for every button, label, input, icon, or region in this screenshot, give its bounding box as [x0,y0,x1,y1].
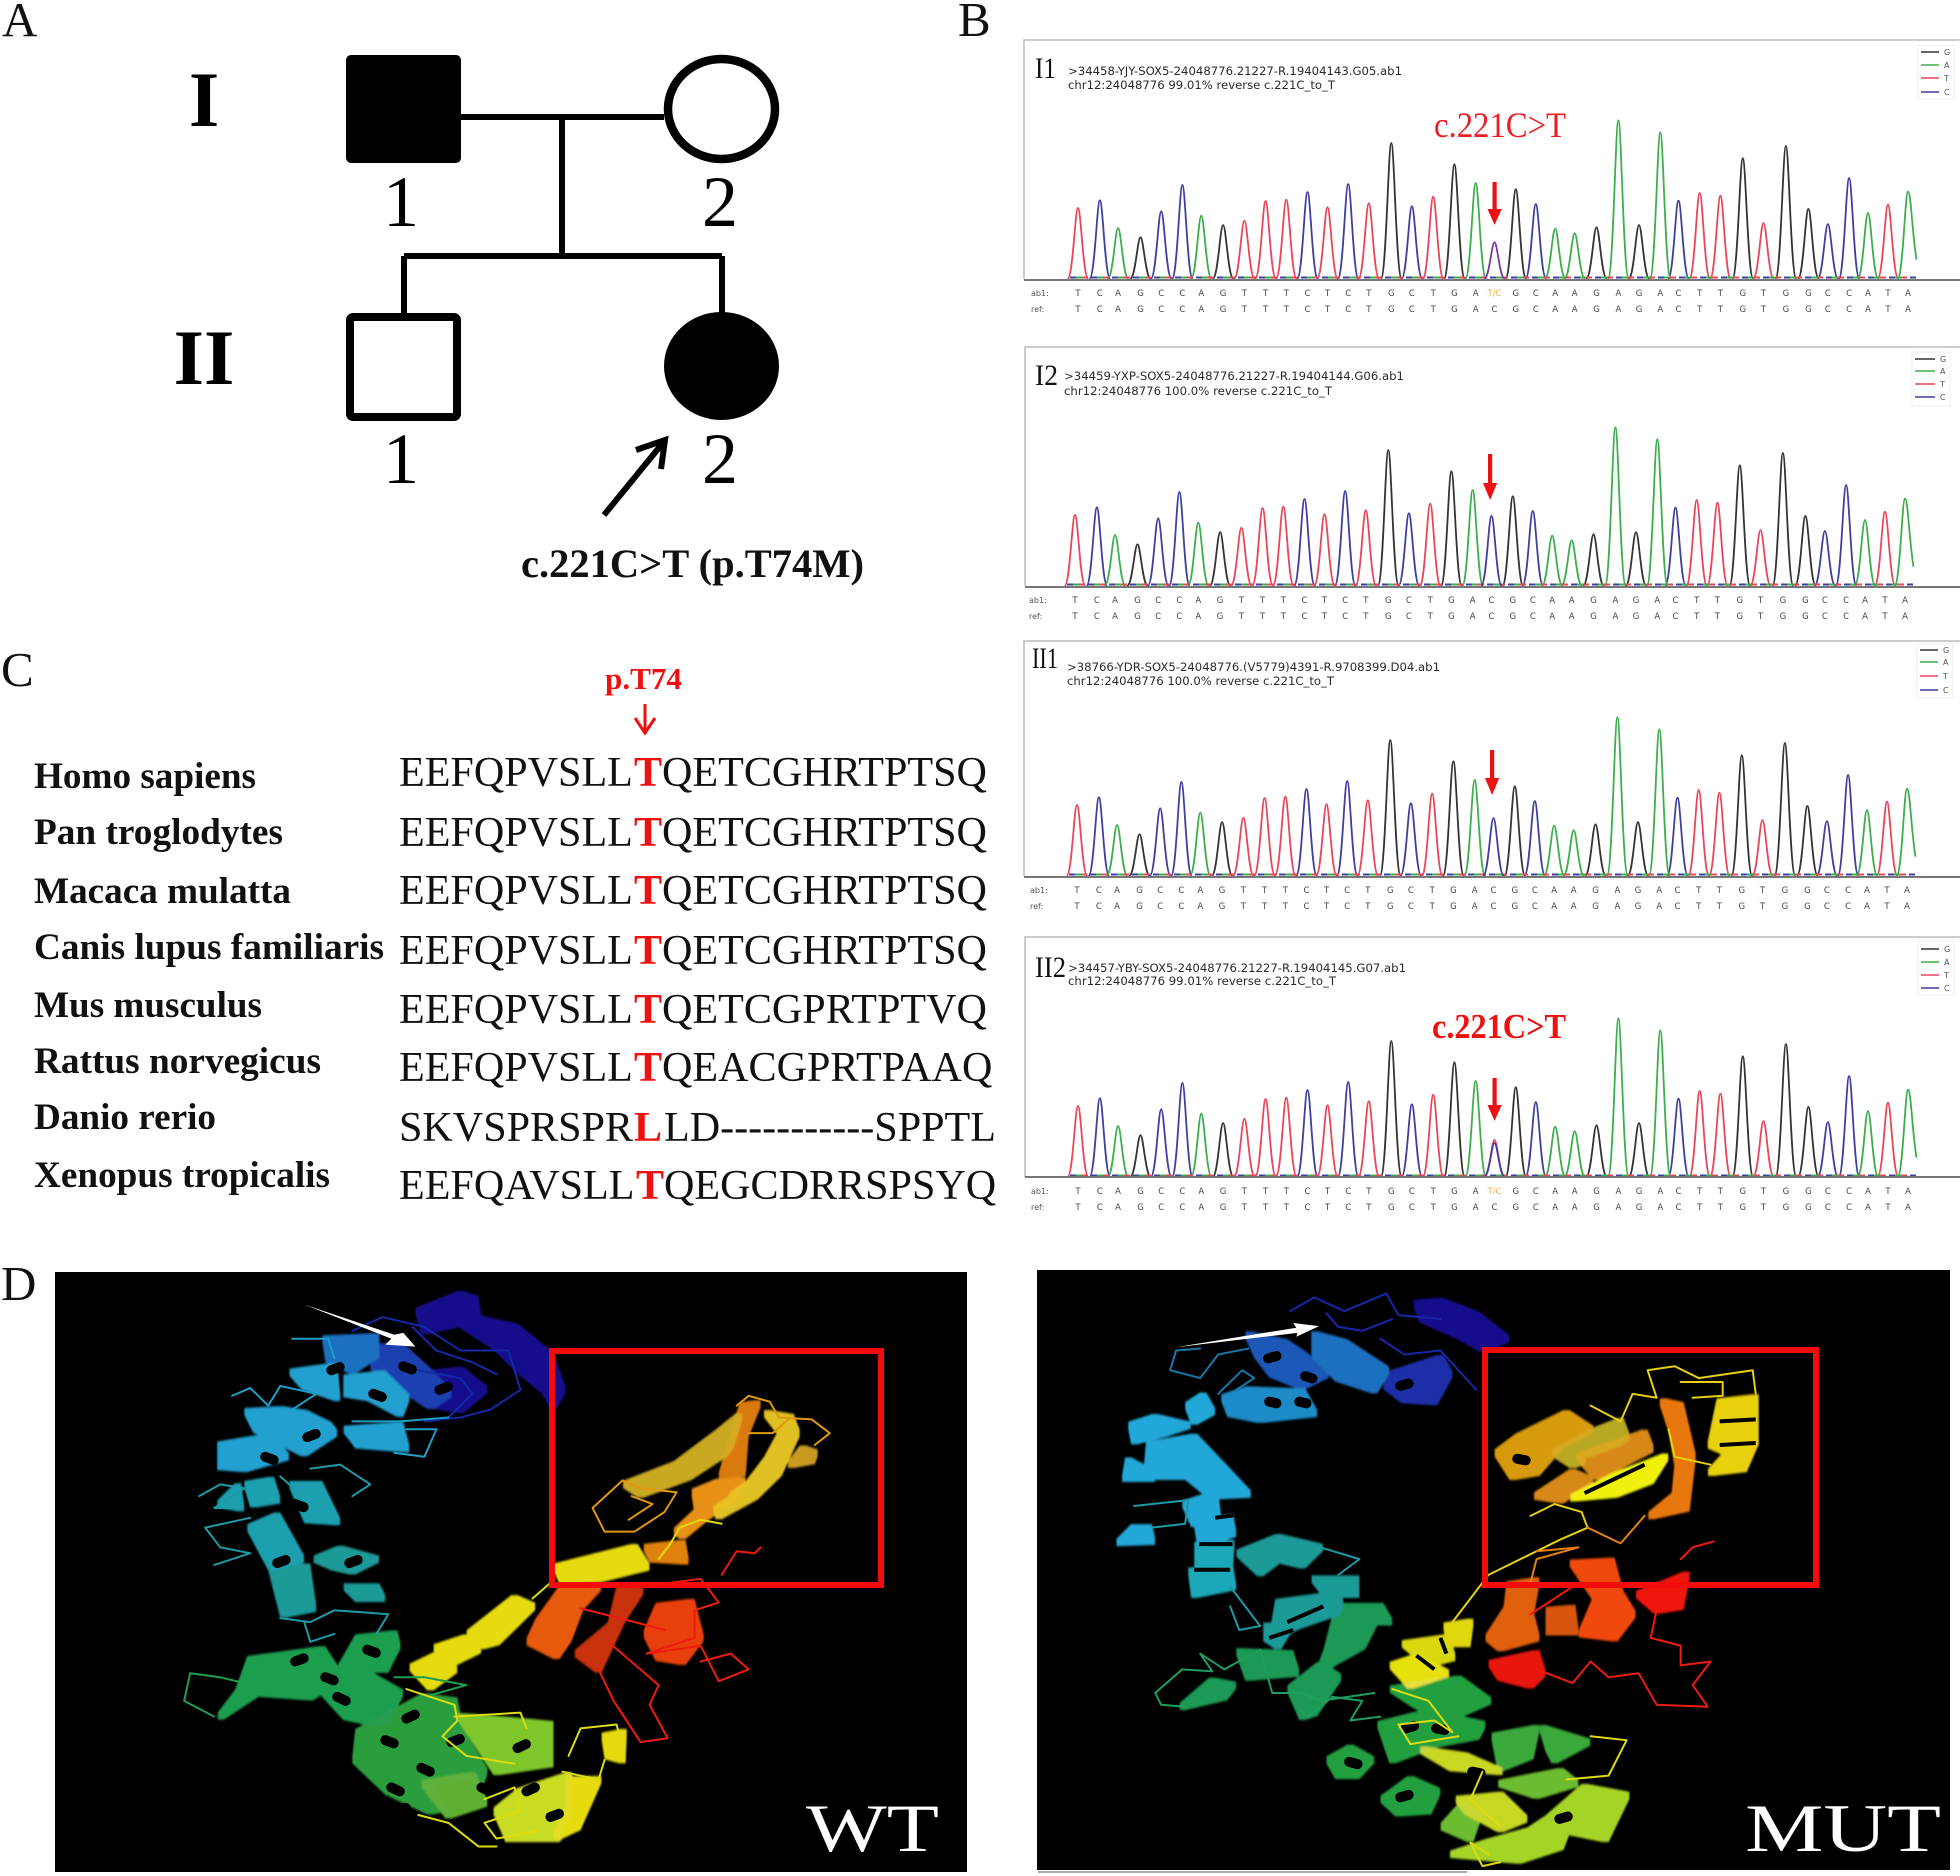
variant callout: c.221C>T [1432,1007,1566,1046]
frame [1025,937,1960,1177]
base calls: GCAAGAGACTTGTGGCCATA [1513,289,1911,299]
individual number I-2: 2 [702,162,738,242]
trace legend: C [1940,393,1946,402]
panel letter C: C [1,642,34,697]
trace legend: G [1944,945,1950,954]
baseline [1025,1176,1960,1178]
pedigree connecting lines [404,117,722,315]
panel A: pedigree [2,0,864,586]
panel D: wild-type protein model [55,1272,967,1872]
panel C: sequence conservation alignment [1,642,996,1209]
panel B chromatogram I1 [1024,40,1960,315]
MUT label: MUT [1745,1790,1941,1866]
base calls [1031,1187,1911,1213]
black background [55,1272,967,1872]
base calls: TCAGCCAGTTTCTCTGCTGACGCAAGAGACTTGTGGCCATA [1071,612,1908,622]
highlight box [552,1351,881,1585]
variant arrow [1488,1078,1502,1121]
variant arrow [1485,750,1499,795]
base calls: ab1: [1031,289,1049,298]
sample label: II1 [1032,642,1058,675]
aligned sequences: QEGCDRRSPSYQ [664,1162,996,1209]
trace legend [1918,45,1954,99]
trace legend: T [1943,74,1949,83]
aligned sequences: SKVSPRSPR [399,1104,634,1151]
proband arrow [604,440,665,515]
trace legend: T [1943,971,1949,980]
panel letter D: D [1,1256,36,1311]
aligned sequences: QETCGHRTPTSQ [662,749,987,796]
aligned sequences: QETCGHRTPTSQ [662,927,987,974]
individual number I-1: 1 [383,162,419,242]
ribbon structure [1119,1293,1756,1866]
base calls: GCAAGAGACTTGTGGCCATA [1513,1187,1911,1197]
aligned sequences: T [634,927,662,974]
traces [1068,1018,1916,1177]
trace legend: T [1942,672,1948,681]
trace legend: G [1940,355,1946,364]
baseline [1024,279,1960,281]
base calls: T/C [1486,1187,1502,1197]
panel D: mutant protein model [1037,1270,1950,1872]
highlight box [1485,1350,1816,1585]
generation label II: II [174,314,234,401]
base calls: TCAGCCAGTTTCTCTGCTGA [1074,1187,1479,1197]
file header: chr12:24048776 100.0% reverse c.221C_to_T [1067,674,1334,688]
white arrow [304,1304,415,1347]
base calls: TCAGCCAGTTTCTCTGCTGACGCAAGAGACTTGTGGCCATA [1071,596,1908,606]
base calls: ab1: [1029,596,1047,605]
aligned sequences: T [636,1162,664,1209]
base calls: ab1: [1031,1187,1049,1196]
variant label: c.221C>T (p.T74M) [521,541,864,586]
file header [1067,660,1440,688]
base calls: TCAGCCAGTTTCTCTGCTGACGCAAGAGACTTGTGGCCATA [1073,902,1910,912]
ribbon structure [184,1295,830,1846]
base calls: TCAGCCAGTTTCTCTGCTGACGCAAGAGACTTGTGGCCATA [1074,1203,1911,1213]
aligned sequences: EEFQPVSLL [399,927,633,974]
trace legend: A [1943,658,1949,667]
aligned sequences: EEFQPVSLL [399,986,633,1033]
aligned sequences: T [634,809,662,856]
species names: Xenopus tropicalis [34,1155,330,1196]
base calls [1029,596,1908,622]
aligned sequences: QEACGPRTPAAQ [662,1044,992,1091]
trace legend: A [1940,367,1946,376]
base calls: T/C [1486,289,1502,299]
white arrow [1175,1323,1319,1347]
black background [1037,1270,1950,1870]
aligned sequences: QETCGHRTPTSQ [662,809,987,856]
base calls: ref: [1031,1203,1044,1212]
aligned sequences: EEFQPVSLL [399,1044,633,1091]
panel B chromatogram II2 [1025,937,1960,1213]
traces [1066,717,1916,876]
trace legend: G [1944,48,1950,57]
file header: >34458-YJY-SOX5-24048776.21227-R.19404143.G05.ab1 [1068,64,1402,78]
frame [1024,40,1960,279]
trace legend: C [1943,686,1949,695]
aligned sequences: T [634,749,662,796]
aligned sequences: T [634,986,662,1033]
base calls: TCAGCCAGTTTCTCTGCTGACGCAAGAGACTTGTGGCCATA [1073,886,1910,896]
file header: chr12:24048776 99.01% reverse c.221C_to_T [1068,78,1335,92]
affected proband II-2 [664,312,779,420]
sample label: I1 [1035,52,1056,85]
trace legend [1918,941,1954,995]
trace legend: A [1944,61,1950,70]
base calls: ref: [1030,902,1043,911]
trace legend [1912,352,1950,406]
species names: Rattus norvegicus [34,1041,321,1082]
aligned sequences [399,749,996,1209]
unaffected brother II-1 [350,317,457,417]
base calls: ref: [1031,305,1044,314]
variant arrow [1488,182,1502,225]
file header: chr12:24048776 99.01% reverse c.221C_to_T [1068,974,1336,988]
WT label: WT [806,1790,939,1866]
file header [1068,64,1402,92]
traces [1068,120,1916,279]
base calls: ab1: [1030,886,1048,895]
unaffected mother I-2 [668,59,775,159]
aligned sequences: QETCGHRTPTSQ [662,867,987,914]
traces [1064,427,1914,586]
species names: Pan troglodytes [34,812,283,853]
sample label: II2 [1035,951,1066,984]
base calls: TCAGCCAGTTTCTCTGCTGACGCAAGAGACTTGTGGCCATA [1074,305,1911,315]
variant arrow [1483,454,1497,500]
species names: Danio rerio [34,1097,216,1138]
aligned sequences: EEFQPVSLL [399,867,633,914]
affected father I-1 [346,55,461,163]
trace legend: G [1943,646,1949,655]
frame [1024,641,1960,876]
aligned sequences: EEFQPVSLL [399,749,633,796]
base calls: TCAGCCAGTTTCTCTGCTGA [1074,289,1479,299]
trace legend: A [1944,958,1950,967]
species names: Macaca mulatta [34,871,291,912]
aligned sequences: L [634,1104,662,1151]
base calls [1031,289,1911,315]
aligned sequences: LD-----------SPPTL [664,1104,996,1151]
base calls: ref: [1029,612,1042,621]
panel B chromatogram I2 [1025,347,1960,622]
file header: chr12:24048776 100.0% reverse c.221C_to_T [1064,384,1332,398]
file header [1068,961,1406,988]
scrollbar remnant [1038,1871,1467,1873]
base calls [1030,886,1910,912]
file header: >38766-YDR-SOX5-24048776.(V5779)4391-R.9708399.D04.ab1 [1067,660,1440,674]
trace legend: C [1944,88,1950,97]
position label: p.T74 [605,661,682,696]
aligned sequences: EEFQPVSLL [399,809,633,856]
trace legend [1917,644,1953,698]
species names [34,756,384,1196]
species names: Canis lupus familiaris [34,927,384,968]
aligned sequences: T [634,867,662,914]
aligned sequences: EEFQAVSLL [399,1162,634,1209]
baseline [1025,586,1960,588]
frame [1025,347,1960,586]
individual number II-1: 1 [383,419,419,499]
generation label I: I [189,56,219,143]
variant callout: c.221C>T [1434,105,1566,145]
panel B chromatogram II1 [1024,641,1960,912]
individual number II-2: 2 [702,419,738,499]
baseline [1024,876,1960,878]
trace legend: T [1939,380,1945,389]
species names: Mus musculus [34,985,262,1026]
sample label: I2 [1035,359,1058,392]
position arrow [635,704,655,733]
file header: >34457-YBY-SOX5-24048776.21227-R.19404145.G07.ab1 [1068,961,1406,975]
trace legend: C [1944,984,1950,993]
aligned sequences: QETCGPRTPTVQ [662,986,987,1033]
aligned sequences: T [634,1044,662,1091]
file header: >34459-YXP-SOX5-24048776.21227-R.19404144.G06.ab1 [1064,369,1404,383]
species names: Homo sapiens [34,756,256,797]
file header [1064,369,1404,398]
